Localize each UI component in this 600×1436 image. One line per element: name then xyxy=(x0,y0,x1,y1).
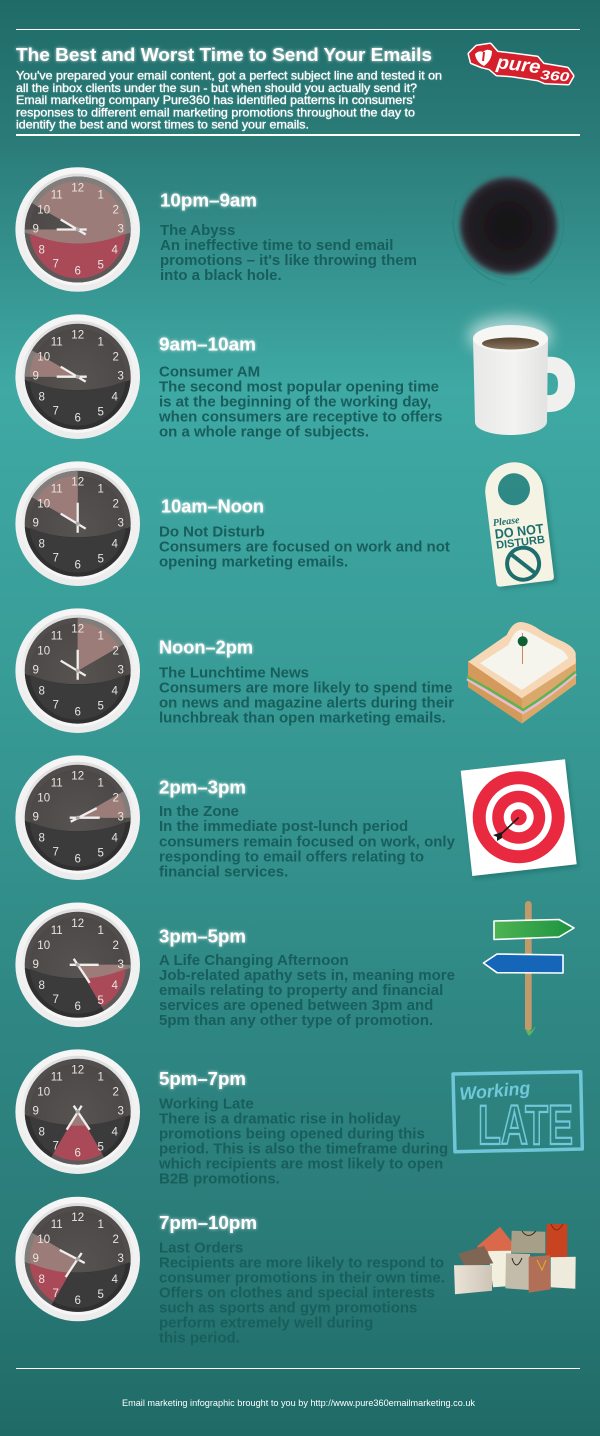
text block: Working Late xyxy=(158,1095,448,1187)
text block: Working Late: B2B promotions. xyxy=(159,1170,280,1187)
clock: 9am–10am: 12 xyxy=(71,330,84,342)
clock: 3pm–5pm: 11 xyxy=(51,925,63,937)
clock: 5pm–7pm: 6 xyxy=(74,1148,81,1160)
clock: 2pm–3pm: 12 xyxy=(71,771,84,783)
clock: 9am–10am: 10 xyxy=(37,352,50,364)
clock: Noon–2pm: 12 xyxy=(71,624,84,636)
text block: Last Orders: consumer promotions in their own time. xyxy=(159,1269,445,1286)
clock: 9am–10am: 2 xyxy=(112,352,119,364)
text block: In the Zone: responding to email offers relating to xyxy=(159,848,424,865)
text block: Consumer AM xyxy=(158,364,442,441)
clock: 7pm–10pm: 12 xyxy=(71,1212,84,1224)
clock: 3pm–5pm: 6 xyxy=(74,1001,81,1013)
clock: 7pm–10pm xyxy=(15,1197,140,1321)
clock: 10pm–9am: 2 xyxy=(112,204,119,216)
clock: 10pm–9am: 9 xyxy=(32,224,39,236)
text block: Last Orders: Offers on clothes and special interests xyxy=(159,1284,435,1301)
clock: 5pm–7pm: 12 xyxy=(71,1065,84,1077)
clock: 10pm–9am: 11 xyxy=(51,190,63,202)
clock: 9am–10am: 6 xyxy=(74,413,81,425)
clock: 10am–Noon: 6 xyxy=(74,560,81,572)
clock: 3pm–5pm: 8 xyxy=(38,980,45,992)
clock: 10pm–9am: 1 xyxy=(97,190,104,202)
clock: 7pm–10pm: 1 xyxy=(97,1219,104,1231)
clock: Noon–2pm: 9 xyxy=(32,665,39,677)
text block: Do Not Disturb: Do Not Disturb xyxy=(159,524,265,541)
text block: A Life Changing Afternoon: emails relating to property and financial xyxy=(159,982,443,999)
clock: 10pm–9am: 4 xyxy=(111,244,118,256)
clock: 2pm–3pm: 10 xyxy=(37,793,50,805)
clock: Noon–2pm xyxy=(15,608,140,733)
clock: 5pm–7pm: 9 xyxy=(32,1106,39,1118)
clock: 9am–10am: 5 xyxy=(97,407,104,419)
clock: 3pm–5pm: 1 xyxy=(97,925,104,937)
text block: Working Late: which recipients are most likely to open xyxy=(158,1155,443,1172)
clock: 5pm–7pm: 11 xyxy=(51,1072,63,1084)
footer text: Email marketing infographic brought to you by http://www.pure360emailmarketing.co.uk xyxy=(122,1398,475,1409)
clock: 3pm–5pm: 12 xyxy=(71,918,84,930)
clock: 10pm–9am: 7 xyxy=(52,258,59,270)
text block: Last Orders: perform extremely well during xyxy=(159,1314,373,1331)
clock: 10pm–9am: 5 xyxy=(97,260,104,272)
text block: Do Not Disturb xyxy=(159,524,450,571)
intro text: responses to different email marketing promotions throughout the day to xyxy=(16,106,415,119)
clock: 5pm–7pm: 4 xyxy=(111,1127,118,1139)
text block: Working Late: Working Late xyxy=(159,1095,254,1112)
clock: 10pm–9am: 12 xyxy=(71,182,84,194)
heading: 5pm–7pm: 5pm–7pm xyxy=(159,1068,246,1089)
clock: 10am–Noon: 9 xyxy=(32,518,39,530)
icon: coffee mug xyxy=(468,316,575,435)
heading: 7pm–10pm: 7pm–10pm xyxy=(159,1212,257,1233)
text block: Consumer AM: on a whole range of subjects. xyxy=(159,424,369,441)
icon: door hanger xyxy=(482,459,558,590)
clock: 7pm–10pm: 11 xyxy=(51,1219,63,1231)
text block: A Life Changing Afternoon xyxy=(159,952,455,1029)
clock: 9am–10am: 9 xyxy=(32,371,39,383)
clock: 9am–10am: 3 xyxy=(117,371,124,383)
clock: 10am–Noon: 1 xyxy=(97,484,104,496)
text block: The Abyss: An ineffective time to send email xyxy=(160,237,393,254)
text block: Last Orders: such as sports and gym promotions xyxy=(159,1299,417,1316)
clock: Noon–2pm: 7 xyxy=(52,700,59,712)
text block: Do Not Disturb: Consumers are focused on work and not xyxy=(159,539,450,556)
clock: 2pm–3pm: 1 xyxy=(97,778,104,790)
heading: 10pm–9am: 10pm–9am xyxy=(160,190,257,211)
title: The Best and Worst Time to Send Your Emails xyxy=(16,44,432,65)
text block: The Abyss: The Abyss xyxy=(160,222,235,239)
clock: 10am–Noon: 7 xyxy=(52,553,59,565)
clock: 7pm–10pm: 7 xyxy=(52,1288,59,1300)
clock: 7pm–10pm: 9 xyxy=(32,1253,39,1265)
clock: 9am–10am: 4 xyxy=(111,392,118,404)
clock: 10pm–9am: 8 xyxy=(38,244,45,256)
clock: 10am–Noon: 11 xyxy=(51,484,63,496)
clock: 10am–Noon: 2 xyxy=(112,499,119,511)
text block: Consumer AM: is at the beginning of the working day, xyxy=(159,394,431,411)
clock: 10pm–9am: 10 xyxy=(37,204,50,216)
text block: Last Orders: Last Orders xyxy=(159,1239,243,1256)
clock: 7pm–10pm: 4 xyxy=(111,1274,118,1286)
icon: working late neon sign xyxy=(453,1072,582,1156)
clock: 10am–Noon: 8 xyxy=(38,539,45,551)
clock: 7pm–10pm: 3 xyxy=(117,1253,124,1265)
clock: 5pm–7pm: 1 xyxy=(97,1072,104,1084)
clock: 2pm–3pm: 11 xyxy=(51,778,63,790)
clock: Noon–2pm: 6 xyxy=(74,707,81,719)
clock: Noon–2pm: 11 xyxy=(51,631,63,643)
icon: black hole xyxy=(452,177,564,285)
heading: 2pm–3pm: 2pm–3pm xyxy=(159,776,246,797)
clock: 2pm–3pm: 4 xyxy=(111,833,118,845)
text block: Working Late: promotions being opened during this xyxy=(159,1125,425,1142)
clock: 5pm–7pm xyxy=(15,1049,140,1174)
icon: working late neon sign: Working xyxy=(459,1078,531,1104)
text block: Last Orders: Recipients are more likely to respond to xyxy=(159,1254,444,1271)
text block: In the Zone: In the Zone xyxy=(159,803,239,820)
heading: 10am–Noon: 10am–Noon xyxy=(161,496,264,517)
clock: 7pm–10pm: 10 xyxy=(37,1234,50,1246)
text block: The Abyss: promotions – it's like throwing them xyxy=(160,252,417,269)
text block: The Lunchtime News: The Lunchtime News xyxy=(159,664,309,681)
intro text: identify the best and worst times to send your emails. xyxy=(16,118,309,132)
text block: In the Zone: financial services. xyxy=(159,863,288,880)
clock: 5pm–7pm: 2 xyxy=(112,1087,119,1099)
text block: Do Not Disturb: opening marketing emails. xyxy=(159,554,348,571)
clock: 9am–10am: 7 xyxy=(52,406,59,418)
clock: 3pm–5pm: 2 xyxy=(112,940,119,952)
text block: In the Zone: In the immediate post-lunch period xyxy=(159,818,408,835)
text block: The Lunchtime News: Consumers are more likely to spend time xyxy=(159,679,452,696)
header rule top xyxy=(16,29,580,30)
clock: 2pm–3pm: 2 xyxy=(112,793,119,805)
heading: Noon–2pm: Noon–2pm xyxy=(159,636,253,657)
text block: Working Late: period. This is also the timeframe during xyxy=(159,1140,448,1157)
clock: 5pm–7pm: 3 xyxy=(117,1106,124,1118)
clock: 9am–10am: 8 xyxy=(38,392,45,404)
heading: 3pm–5pm: 3pm–5pm xyxy=(159,925,246,946)
clock: Noon–2pm: 4 xyxy=(111,686,118,698)
clock: 3pm–5pm xyxy=(15,902,140,1027)
clock: 10am–Noon: 12 xyxy=(71,477,84,489)
heading: 9am–10am: 9am–10am xyxy=(159,334,256,355)
icon: signpost xyxy=(484,901,574,1036)
clock: 10pm–9am xyxy=(15,167,140,292)
clock: 9am–10am xyxy=(15,314,140,439)
clock: 3pm–5pm: 4 xyxy=(111,980,118,992)
clock: 3pm–5pm: 5 xyxy=(97,995,104,1007)
clock: 3pm–5pm: 9 xyxy=(32,959,39,971)
icon: door hanger: Please xyxy=(492,515,521,529)
clock: 7pm–10pm: 6 xyxy=(74,1295,81,1307)
clock: Noon–2pm: 5 xyxy=(97,701,104,713)
intro text: all the inbox clients under the sun - but when should you actually send it? xyxy=(16,82,418,95)
clock: 7pm–10pm: 2 xyxy=(112,1234,119,1246)
clock: 3pm–5pm: 7 xyxy=(52,994,59,1006)
clock: 5pm–7pm: 8 xyxy=(38,1127,45,1139)
text block: A Life Changing Afternoon: 5pm than any other type of promotion. xyxy=(159,1012,433,1029)
clock: 3pm–5pm: 3 xyxy=(117,959,124,971)
text block: Consumer AM: when consumers are receptive to offers xyxy=(158,409,442,426)
clock: 10am–Noon xyxy=(15,461,140,586)
icon: sandwich xyxy=(467,622,576,724)
text block: In the Zone: consumers remain focused on work, only xyxy=(159,833,456,850)
clock: 2pm–3pm: 8 xyxy=(38,833,45,845)
icon: target with dart xyxy=(461,759,579,879)
icon: door hanger: DISTURB xyxy=(496,534,546,552)
text block: A Life Changing Afternoon: services are opened between 3pm and xyxy=(159,997,433,1014)
clock: 9am–10am: 11 xyxy=(51,337,63,349)
clock: 2pm–3pm xyxy=(15,755,140,880)
text block: The Abyss xyxy=(160,222,417,284)
intro text: You've prepared your email content, got a perfect subject line and tested it on xyxy=(16,70,442,82)
clock: 5pm–7pm: 5 xyxy=(97,1142,104,1154)
text block: Working Late: There is a dramatic rise in holiday xyxy=(159,1110,401,1127)
logo: Pure360: pure xyxy=(494,52,542,78)
clock: 5pm–7pm: 7 xyxy=(52,1141,59,1153)
clock: 10am–Noon: 4 xyxy=(111,539,118,551)
intro text xyxy=(16,70,442,132)
text block: The Lunchtime News: on news and magazine alerts during their xyxy=(159,694,454,711)
text block: Consumer AM: The second most popular opening time xyxy=(159,379,439,396)
text block: The Abyss: into a black hole. xyxy=(160,267,282,284)
clock: 2pm–3pm: 5 xyxy=(97,848,104,860)
logo: Pure360: 360 xyxy=(540,67,571,85)
text block: A Life Changing Afternoon: A Life Changing Afternoon xyxy=(159,952,349,969)
footer rule xyxy=(16,1368,580,1369)
clock: 10am–Noon: 3 xyxy=(117,518,124,530)
text block: Last Orders: this period. xyxy=(159,1329,240,1346)
text block: Last Orders xyxy=(159,1239,445,1346)
clock: 10pm–9am: 3 xyxy=(117,224,124,236)
clock: Noon–2pm: 3 xyxy=(117,665,124,677)
header rule bottom xyxy=(16,134,580,136)
clock: Noon–2pm: 1 xyxy=(97,631,104,643)
text block: The Lunchtime News: lunchbreak than open marketing emails. xyxy=(159,709,446,726)
clock: 10am–Noon: 5 xyxy=(97,554,104,566)
text block: A Life Changing Afternoon: Job-related apathy sets in, meaning more xyxy=(159,967,455,984)
clock: 2pm–3pm: 7 xyxy=(52,847,59,859)
text block: The Lunchtime News xyxy=(159,664,454,726)
icon: door hanger: DO NOT xyxy=(494,521,545,542)
clock: Noon–2pm: 10 xyxy=(37,646,50,658)
clock: 2pm–3pm: 3 xyxy=(117,812,124,824)
clock: 5pm–7pm: 10 xyxy=(37,1087,50,1099)
clock: 9am–10am: 1 xyxy=(97,337,104,349)
clock: 7pm–10pm: 8 xyxy=(38,1274,45,1286)
clock: Noon–2pm: 2 xyxy=(112,646,119,658)
clock: 2pm–3pm: 9 xyxy=(32,812,39,824)
text block: Consumer AM: Consumer AM xyxy=(159,364,260,380)
clock: Noon–2pm: 8 xyxy=(38,686,45,698)
text block: In the Zone xyxy=(159,803,456,880)
clock: 10am–Noon: 10 xyxy=(37,499,50,511)
logo: Pure360 xyxy=(470,45,572,85)
clock: 3pm–5pm: 10 xyxy=(37,940,50,952)
clock: 7pm–10pm: 5 xyxy=(97,1289,104,1301)
clock: 2pm–3pm: 6 xyxy=(74,854,81,866)
intro text: Email marketing company Pure360 has identified patterns in consumers' xyxy=(16,94,415,107)
clock: 10pm–9am: 6 xyxy=(74,266,81,278)
icon: shopping bags xyxy=(454,1224,576,1294)
